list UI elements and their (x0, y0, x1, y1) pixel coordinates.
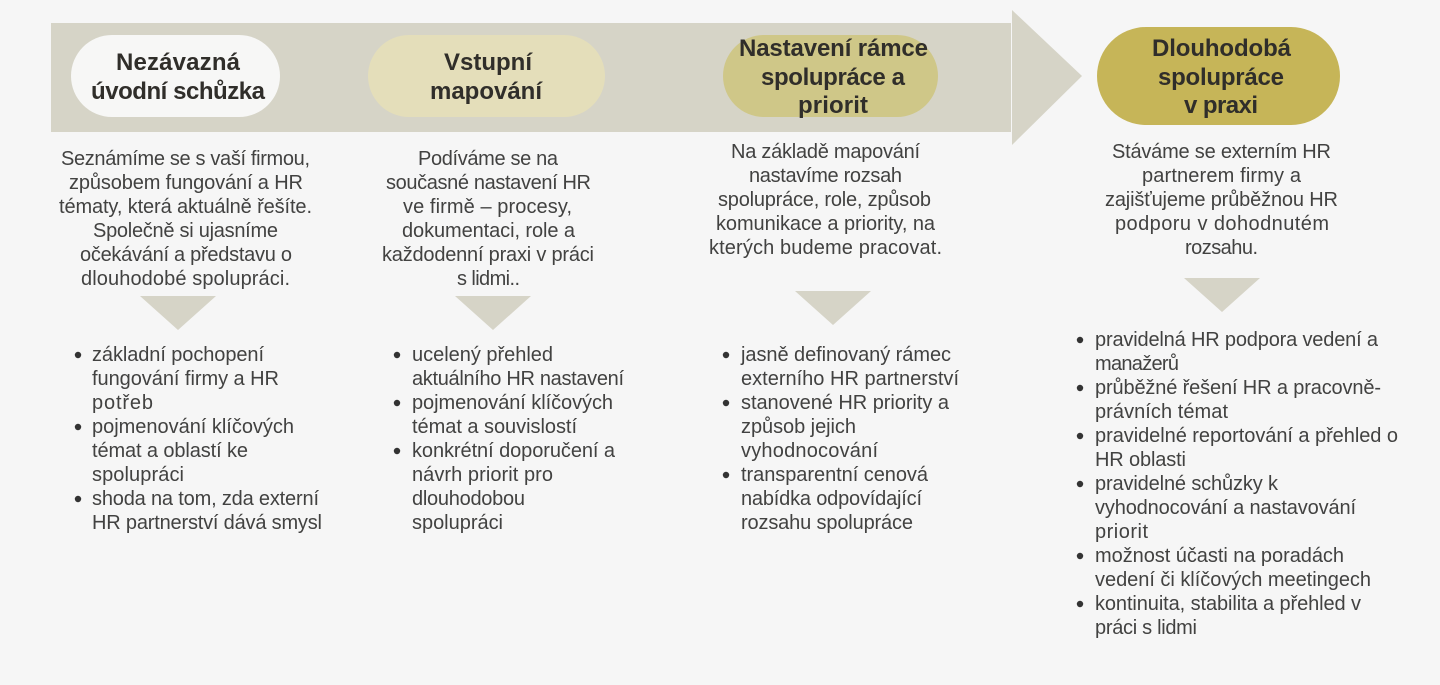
step 1 description: způsobem fungování a HR (69, 172, 303, 194)
arrow: step 1 down (140, 296, 216, 330)
step 4 heading pill (1097, 27, 1340, 125)
step 2 description (382, 148, 594, 290)
step 2 description: Podíváme se na (418, 148, 559, 170)
arrow: timeline band (51, 10, 1082, 145)
step 3 outcomes list: stanovené HR priority a (741, 392, 950, 414)
step 2 outcomes list: konkrétní doporučení a (412, 440, 616, 462)
step 4 outcomes list: priorit (1095, 521, 1148, 543)
step 4 outcomes list: vyhodnocování a nastavování (1095, 497, 1356, 519)
step 2 outcomes list: návrh priorit pro (412, 464, 553, 486)
step 1 outcomes list (75, 344, 322, 534)
step 3 outcomes list: způsob jejich (741, 416, 856, 438)
step 2 heading pill (368, 35, 605, 117)
arrow: step 4 down (1184, 278, 1260, 312)
step 1 outcomes list: spolupráci (92, 464, 184, 486)
step 2 description: každodenní praxi v práci (382, 244, 594, 266)
step 4 outcomes list: průběžné řešení HR a pracovně- (1095, 377, 1381, 399)
step 2 outcomes list: témat a souvislostí (412, 416, 577, 438)
step 1 heading pill: Nezávazná (116, 49, 241, 76)
step 2 outcomes list: ucelený přehled (412, 344, 553, 366)
step 4 description: podporu v dohodnutém (1115, 213, 1329, 235)
arrow: step 2 down (455, 296, 531, 330)
step 4 outcomes list: manažerů (1095, 353, 1179, 375)
step 2 description: ve firmě – procesy, (403, 196, 572, 218)
step 2 description: s lidmi.. (457, 268, 520, 290)
step 2 outcomes list: spolupráci (412, 512, 503, 534)
step 4 heading pill: spolupráce (1158, 64, 1284, 91)
step 4 outcomes list: vedení či klíčových meetingech (1095, 569, 1371, 591)
step 2 outcomes list: aktuálního HR nastavení (412, 368, 624, 390)
step 2 heading pill: Vstupní (444, 49, 533, 76)
step 4 outcomes list: kontinuita, stabilita a přehled v (1095, 593, 1361, 615)
step 3 outcomes list: externího HR partnerství (741, 368, 959, 390)
step 1 outcomes list: základní pochopení (92, 344, 264, 366)
step 4 description: zajišťujeme průběžnou HR (1105, 189, 1338, 211)
step 3 heading pill (723, 35, 938, 119)
step 3 description: komunikace a priority, na (716, 213, 936, 235)
step 1 outcomes list: pojmenování klíčových (92, 416, 294, 438)
step 2 description: dokumentaci, role a (402, 220, 576, 242)
step 3 outcomes list: transparentní cenová (741, 464, 929, 486)
step 4 heading pill: Dlouhodobá (1152, 35, 1292, 62)
step 4 outcomes list: právních témat (1095, 401, 1228, 423)
step 1 outcomes list: shoda na tom, zda externí (92, 488, 319, 510)
step 3 outcomes list: jasně definovaný rámec (740, 344, 951, 366)
step 1 outcomes list: fungování firmy a HR (92, 368, 279, 390)
step 3 heading pill: spolupráce a (761, 64, 906, 91)
step 4 description: Stáváme se externím HR (1112, 141, 1331, 163)
step 1 description: Seznámíme se s vaší firmou, (61, 148, 310, 170)
step 2 heading pill: mapování (430, 78, 543, 105)
step 3 outcomes list: vyhodnocování (741, 440, 878, 462)
step 2 outcomes list: dlouhodobou (412, 488, 525, 510)
step 2 outcomes list: pojmenování klíčových (412, 392, 613, 414)
step 3 description (709, 141, 942, 259)
step 4 outcomes list: práci s lidmi (1095, 617, 1197, 639)
step 1 description (59, 148, 312, 290)
step 1 description: tématy, která aktuálně řešíte. (59, 196, 312, 218)
step 3 outcomes list (723, 344, 959, 534)
step 3 description: spolupráce, role, způsob (718, 189, 931, 211)
step 1 heading pill: úvodní schůzka (91, 78, 266, 105)
arrow: step 3 down (795, 291, 871, 325)
step 2 outcomes list (394, 344, 624, 534)
step 3 heading pill: priorit (798, 92, 868, 119)
step 1 outcomes list: HR partnerství dává smysl (92, 512, 322, 534)
step 1 heading pill (71, 35, 280, 117)
step 4 outcomes list: možnost účasti na poradách (1095, 545, 1344, 567)
step 4 outcomes list: pravidelná HR podpora vedení a (1095, 329, 1379, 351)
step 4 outcomes list: pravidelné reportování a přehled o (1095, 425, 1398, 447)
step 3 description: nastavíme rozsah (749, 165, 902, 187)
step 1 outcomes list: témat a oblastí ke (92, 440, 248, 462)
step 3 outcomes list: nabídka odpovídající (741, 488, 922, 510)
step 4 description (1105, 141, 1338, 259)
step 3 heading pill: Nastavení rámce (739, 35, 928, 62)
step 3 outcomes list: rozsahu spolupráce (741, 512, 913, 534)
step 3 description: kterých budeme pracovat. (709, 237, 942, 259)
step 1 outcomes list: potřeb (92, 392, 153, 414)
step 4 outcomes list: HR oblasti (1095, 449, 1186, 471)
step 4 outcomes list (1077, 329, 1398, 639)
step 4 heading pill: v praxi (1184, 92, 1258, 119)
step 4 description: partnerem firmy a (1142, 165, 1302, 187)
step 2 description: současné nastavení HR (386, 172, 591, 194)
step 1 description: očekávání a představu o (80, 244, 292, 266)
step 4 outcomes list: pravidelné schůzky k (1095, 473, 1279, 495)
step 3 description: Na základě mapování (731, 141, 920, 163)
step 1 description: Společně si ujasníme (93, 220, 278, 242)
step 1 description: dlouhodobé spolupráci. (81, 268, 290, 290)
step 4 description: rozsahu. (1185, 237, 1258, 259)
